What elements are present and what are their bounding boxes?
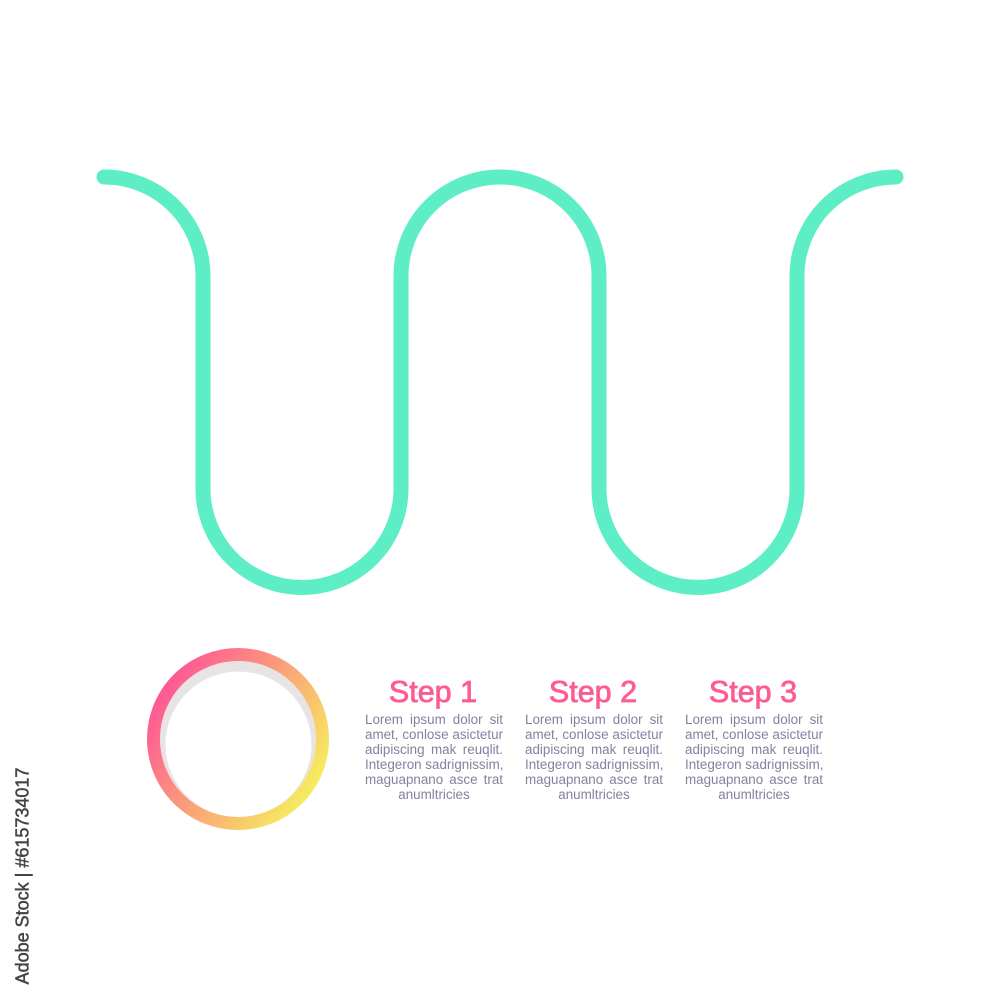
step 2 text: adipiscing mak reuqlit. <box>525 742 663 757</box>
step 1 text: amet, conlose asictetur <box>365 727 503 742</box>
step 1 text: maguapnano asce trat <box>365 772 503 787</box>
step 2 column <box>525 675 663 802</box>
step 1 heading: Step 1 <box>389 675 477 709</box>
step 1 text: Integeron sadrignissim, <box>365 757 503 772</box>
step 2 text: Integeron sadrignissim, <box>525 757 663 772</box>
step 2 text: anumltricies <box>558 787 630 802</box>
step 3 text: maguapnano asce trat <box>685 772 823 787</box>
step 1 text <box>365 712 503 802</box>
step 3 column <box>685 675 823 802</box>
step 1 text: anumltricies <box>398 787 470 802</box>
step 2 text: Lorem ipsum dolor sit <box>525 712 663 727</box>
step 3 text: Integeron sadrignissim, <box>685 757 823 772</box>
step 2 heading: Step 2 <box>549 675 637 709</box>
step 3 text: adipiscing mak reuqlit. <box>685 742 823 757</box>
step 2 text: maguapnano asce trat <box>525 772 663 787</box>
step 1 text: adipiscing mak reuqlit. <box>365 742 503 757</box>
stock credit text: Adobe Stock | #615734017 <box>12 768 32 984</box>
step 3 heading: Step 3 <box>709 675 797 709</box>
step 3 text <box>685 712 823 802</box>
step 1 text: Lorem ipsum dolor sit <box>365 712 503 727</box>
step 3 text: amet, conlose asictetur <box>685 727 823 742</box>
step 2 text: amet, conlose asictetur <box>525 727 663 742</box>
step 1 column <box>365 675 503 802</box>
step 2 text <box>525 712 663 802</box>
step 3 text: anumltricies <box>718 787 790 802</box>
step 3 text: Lorem ipsum dolor sit <box>685 712 823 727</box>
